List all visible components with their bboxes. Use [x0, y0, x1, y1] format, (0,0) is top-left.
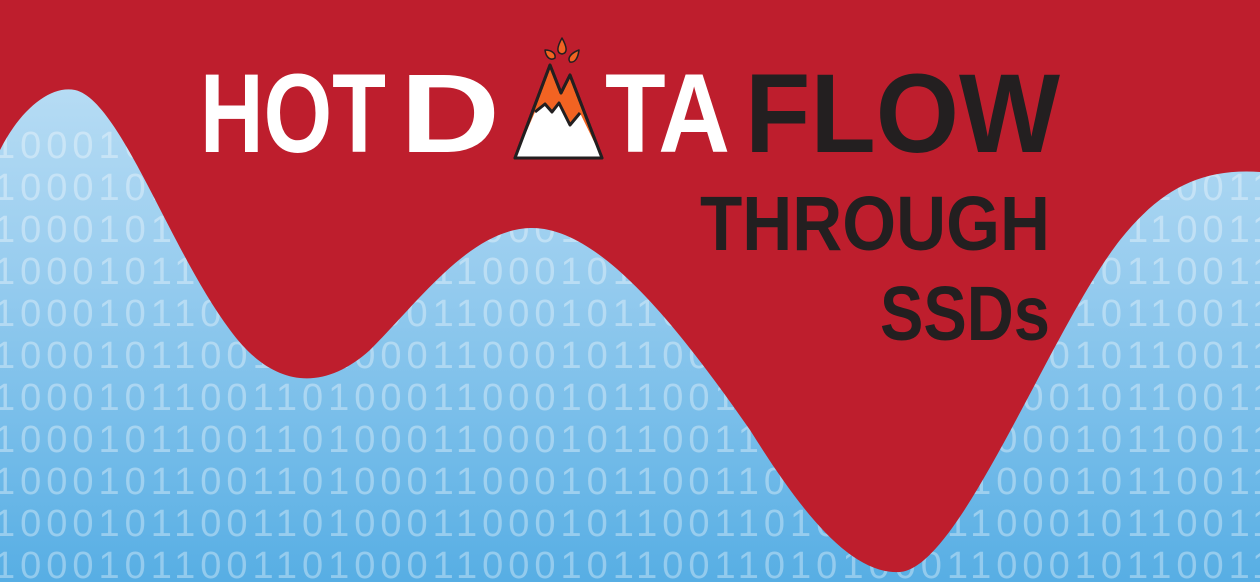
icon: volcano — [515, 38, 602, 158]
title: FLOW — [745, 51, 1060, 176]
title: D — [400, 51, 500, 176]
title: HOT — [200, 51, 386, 176]
subtitle: through: THROUGH — [700, 181, 1050, 267]
title — [200, 51, 1060, 176]
title: TA — [605, 51, 730, 176]
subtitle: SSDs: SSDs — [880, 271, 1050, 357]
